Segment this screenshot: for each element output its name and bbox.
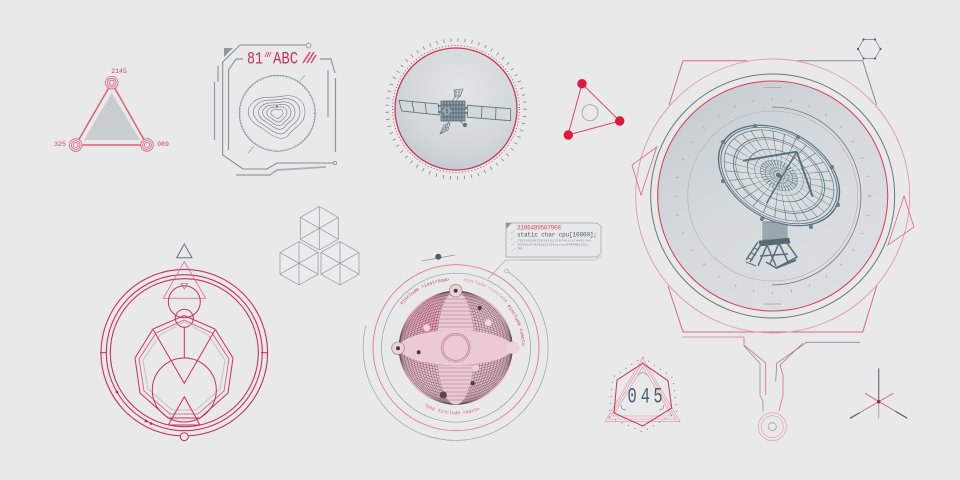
horizontal latitude lines [399,295,513,401]
right solar panel [467,105,511,121]
inner ring [688,111,858,281]
outer red ring [373,265,539,431]
tiny text lines [517,240,591,250]
connector hexagon [857,38,882,60]
corner notch [224,48,233,57]
heading slashes [265,52,271,57]
red triangle node [564,79,624,140]
chevron V [153,330,215,383]
tiny text lines: 7094958745361121354ugresm54PH4BZ2261 [517,244,588,246]
number: 045 [628,384,663,409]
code number: 3186489567968 [517,224,561,232]
contour circle [239,75,315,153]
concentric rings [101,269,268,436]
label 089: 089 [157,141,169,148]
left cube [280,242,318,285]
side triangles [632,147,914,245]
sphere body [399,291,513,405]
dotted hexagon [609,357,677,432]
inner dark arc [772,107,861,285]
left solar panel [399,100,439,115]
code line: static char cpu[10000]; [517,232,597,238]
tick marks [676,99,870,293]
top and bottom marks [764,88,781,304]
grey triangle marker [177,244,192,258]
crimson hexagon [614,363,672,426]
terminal circle [758,413,786,441]
lens stripes [438,294,474,400]
pale triangles [605,358,680,422]
head arrow [181,284,188,289]
vertical lens [437,291,475,405]
lower triangle [168,397,200,425]
code callout [506,223,602,260]
inner frame lines [214,59,336,175]
radio telescope [701,105,857,268]
center line [183,327,185,358]
label 325: 325 [54,141,66,148]
star axis icon [850,368,907,418]
central circles [441,333,470,362]
outer pale ring [636,59,910,333]
satellite dial [387,40,525,178]
arc label 4: ?php #include <math> [425,404,480,414]
triangle node widget [54,68,169,151]
tiny text lines: 765 [517,248,523,250]
satellite [399,89,511,134]
vertical axis [878,368,880,418]
label 2145: 2145 [111,68,127,75]
sphere nodes [392,284,520,399]
inner circle [582,105,598,121]
triangle lines [568,84,620,135]
upper red line [682,336,744,338]
reflector [701,105,857,246]
left diagonal [850,393,893,418]
right diagonal [865,393,907,418]
satellite body [438,101,468,121]
blue grey ring [382,273,530,422]
right circuit trace [776,342,860,411]
top node [105,76,118,89]
sphere diagram [362,254,560,441]
hatch marks [511,230,515,252]
top circle [168,286,200,318]
bottom antenna [440,121,467,134]
arc end marker [505,269,509,273]
left circuit trace [744,337,766,412]
radar dish dial [632,38,914,333]
tick ring [387,40,525,178]
callout frame [506,223,601,257]
bezel outline [668,61,877,332]
triangle outline [76,83,147,145]
dish connector [682,337,860,441]
top antenna [452,89,463,101]
outer frame [223,45,333,169]
corner notch [506,223,512,229]
outer corner [520,255,602,260]
heading ABC: ABC [273,49,298,69]
arc label 1: #include <iostream> [400,278,450,305]
center dot [877,400,880,403]
rim bolts [721,124,840,229]
right node [141,139,153,151]
grey triangle [84,93,140,140]
side ticks [100,352,268,354]
meridian lines [404,291,508,405]
outer polygon [135,316,233,418]
arc label 3: #include <vector> [507,304,525,346]
frame end circles [306,43,337,165]
hatched mark [303,52,316,63]
heading 81: 81 [247,49,263,69]
inner grey polygon [143,322,225,410]
ring dots [116,391,152,425]
crimson emblem [100,244,268,441]
dish face [395,48,517,170]
middle polygon [139,320,229,414]
inner brackets [621,372,664,410]
outer grey arc [363,271,548,440]
tiny text lines: 7292092462381845172974512474405344 [517,240,591,242]
pale triangle [163,262,206,298]
top cube [300,206,338,250]
dotted ring [392,46,520,172]
dark ring [651,74,895,318]
HUD contour panel [214,43,337,175]
neck circle [175,309,193,327]
cube cluster [280,206,359,285]
red dots [564,79,624,140]
045 badge [605,357,680,432]
bottom node [180,433,188,441]
callout leader [488,260,560,279]
infographic canvas [54,38,914,442]
dish face [658,81,888,311]
horizontal lens [399,330,513,365]
lower big circle [152,358,216,422]
pedestal [746,222,797,268]
right cube [321,242,359,285]
feed struts [743,152,813,203]
top satellite marker [422,254,455,261]
left node [69,139,82,151]
arc label 2: #include <cstream> [463,278,508,302]
